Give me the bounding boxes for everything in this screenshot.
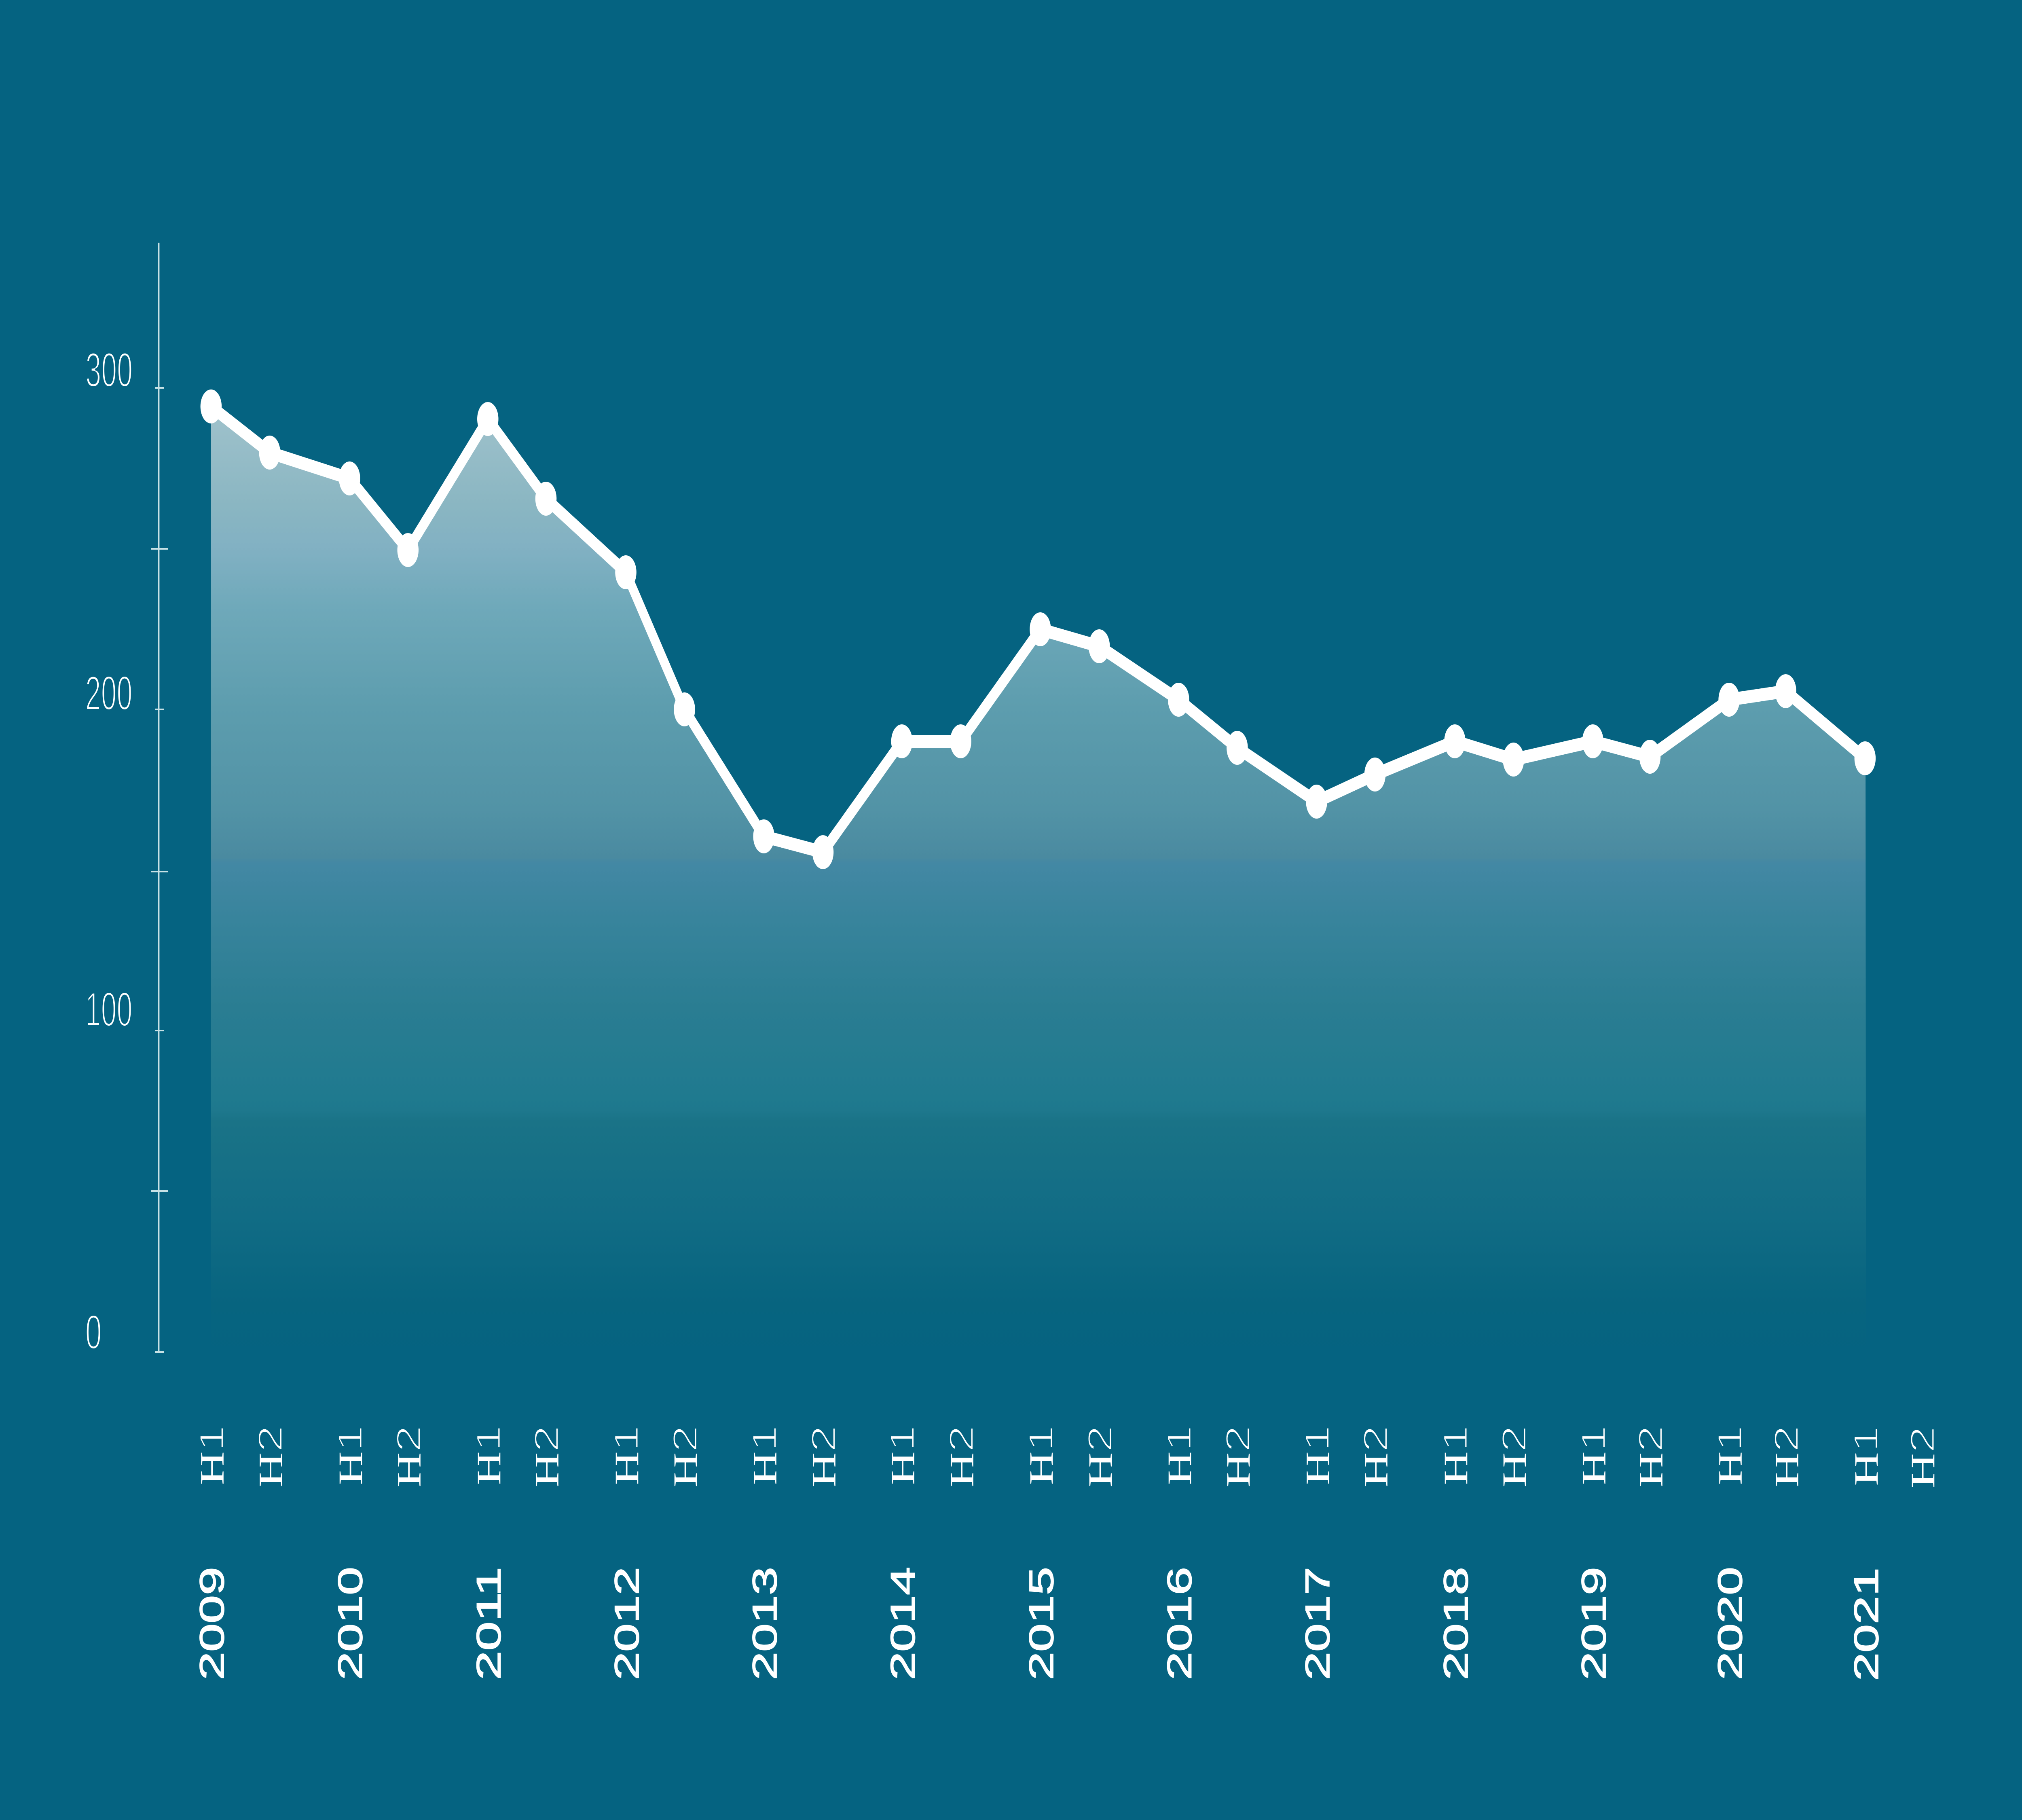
half-year labels: H2 (1219, 1425, 1257, 1488)
year labels (193, 1567, 1885, 1681)
half-year labels: H1 (1436, 1425, 1475, 1485)
y axis labels (85, 343, 133, 1359)
half-year labels: H1 (883, 1425, 922, 1485)
half-year labels: H1 (469, 1425, 508, 1485)
half-year labels: H2 (1631, 1425, 1670, 1488)
half-year labels: H2 (666, 1425, 704, 1488)
half-year labels: H1 (1022, 1425, 1060, 1485)
half-year labels: H1 (1298, 1425, 1337, 1485)
year labels: 2019 (1575, 1567, 1613, 1680)
y axis with tick marks (151, 243, 168, 1353)
half-year labels: H2 (1904, 1426, 1942, 1488)
half-year labels: H1 (192, 1425, 231, 1485)
half-year labels: H1 (1160, 1425, 1199, 1485)
half-year labels: H2 (389, 1425, 428, 1488)
y axis labels: 100 (85, 982, 133, 1037)
year labels: 2012 (607, 1567, 646, 1680)
half-year labels: H1 (331, 1425, 370, 1485)
half-year labels: H1 (1847, 1426, 1885, 1486)
half-year labels: H2 (804, 1425, 843, 1488)
half-year labels (192, 1425, 1942, 1488)
half-year labels: H2 (1495, 1425, 1533, 1488)
year labels: 2020 (1711, 1567, 1749, 1680)
y axis labels: 0 (85, 1305, 102, 1359)
half-year labels: H2 (1767, 1425, 1806, 1488)
y axis labels: 300 (85, 343, 133, 397)
half-year labels: H2 (1356, 1425, 1395, 1488)
year labels: 2018 (1436, 1567, 1475, 1680)
half-year labels: H2 (251, 1425, 290, 1488)
year labels: 2015 (1022, 1567, 1060, 1680)
half-year labels: H2 (942, 1425, 981, 1488)
half-year labels: H1 (1574, 1425, 1613, 1485)
half-year labels: H1 (1711, 1425, 1749, 1485)
year labels: 2013 (746, 1567, 784, 1680)
year labels: 2014 (884, 1567, 922, 1680)
y axis labels: 200 (85, 666, 133, 720)
half-year labels: H2 (1081, 1425, 1119, 1488)
data point markers (201, 389, 1876, 869)
half-year labels: H1 (607, 1425, 646, 1485)
year labels: 2017 (1298, 1567, 1337, 1680)
half-year labels: H1 (745, 1425, 784, 1485)
year labels: 2009 (193, 1567, 231, 1680)
year labels: 2021 (1847, 1568, 1885, 1681)
year labels: 2010 (331, 1567, 369, 1680)
area fill under the line (211, 406, 1866, 1352)
half-year labels: H2 (527, 1425, 566, 1488)
data line (211, 406, 1865, 852)
year labels: 2011 (470, 1567, 508, 1680)
year labels: 2016 (1160, 1567, 1199, 1680)
